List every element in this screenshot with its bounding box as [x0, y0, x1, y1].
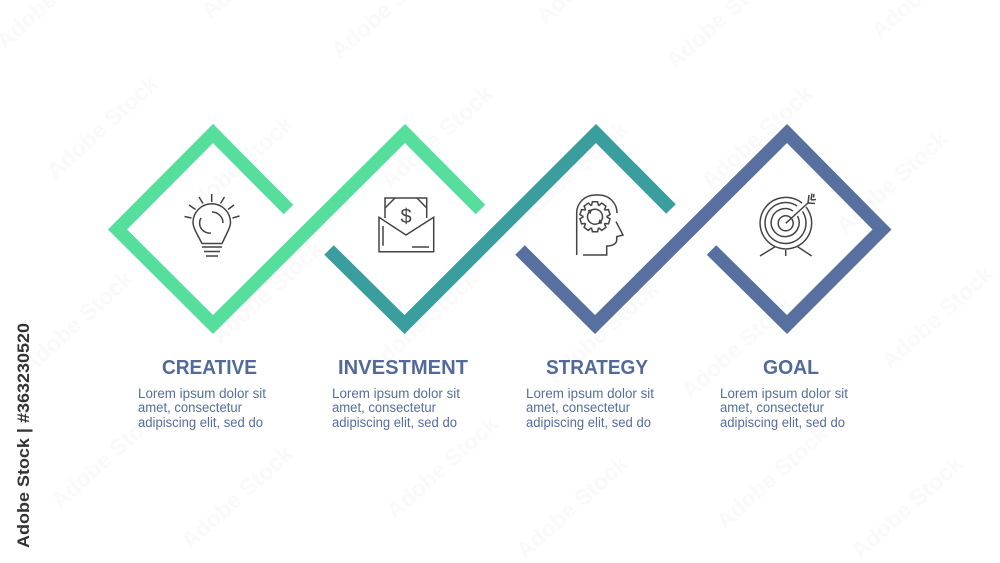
heading: creative: CREATIVE [162, 357, 257, 379]
gear [580, 202, 610, 232]
text block: goal: amet, consectetur [720, 400, 824, 415]
text block: strategy [526, 386, 654, 430]
watermark pattern: Adobe Stock [511, 115, 633, 229]
text block: strategy: amet, consectetur [526, 400, 630, 415]
icon: envelope with dollar note: $ [400, 206, 412, 228]
text block: investment [332, 386, 460, 430]
teal ribbon [329, 134, 671, 324]
icon: light bulb [184, 194, 240, 256]
watermark pattern: Adobe Stock [41, 70, 163, 184]
icon: envelope with dollar note [379, 198, 434, 252]
text block: creative: amet, consectetur [138, 400, 242, 415]
heading: strategy: STRATEGY [546, 357, 649, 379]
text block: creative [138, 386, 266, 430]
watermark pattern: Adobe Stock [846, 450, 968, 563]
watermark pattern: Adobe Stock [876, 260, 998, 374]
watermark pattern: Adobe Stock [511, 450, 633, 563]
watermark pattern: Adobe Stock [676, 290, 798, 404]
watermark pattern: Adobe Stock [361, 265, 483, 379]
watermark pattern: Adobe Stock [176, 110, 298, 224]
watermark pattern: Adobe Stock [16, 265, 138, 379]
text block: goal: Lorem ipsum dolor sit [720, 386, 848, 401]
watermark pattern: Adobe Stock [46, 400, 168, 514]
watermark pattern: Adobe Stock [381, 410, 503, 524]
watermark pattern: Adobe Stock [176, 440, 298, 554]
heading: goal: GOAL [763, 357, 819, 379]
icon: target with arrow [760, 194, 816, 256]
text block: investment: adipiscing elit, sed do [332, 415, 457, 430]
text block: strategy: Lorem ipsum dolor sit [526, 386, 654, 401]
text block: investment: amet, consectetur [332, 400, 436, 415]
text block: creative: adipiscing elit, sed do [138, 415, 263, 430]
text block: creative: Lorem ipsum dolor sit [138, 386, 266, 401]
watermark pattern: Adobe Stock [206, 235, 328, 349]
icon: head with gear [577, 195, 623, 255]
watermark pattern: Adobe Stock [696, 80, 818, 194]
blue ribbon [520, 134, 882, 324]
text block: strategy: adipiscing elit, sed do [526, 415, 651, 430]
green ribbon [118, 134, 480, 324]
text block: goal [720, 386, 848, 430]
text block: investment: Lorem ipsum dolor sit [332, 386, 460, 401]
watermark pattern: Adobe Stock [831, 125, 953, 239]
heading: investment: INVESTMENT [338, 357, 468, 379]
stock id caption: Adobe Stock | #363230520 [14, 323, 33, 548]
text block: goal: adipiscing elit, sed do [720, 415, 845, 430]
watermark pattern: Adobe Stock [376, 80, 498, 194]
watermark pattern: Adobe Stock [711, 420, 833, 534]
watermark pattern: Adobe Stock [541, 275, 663, 389]
